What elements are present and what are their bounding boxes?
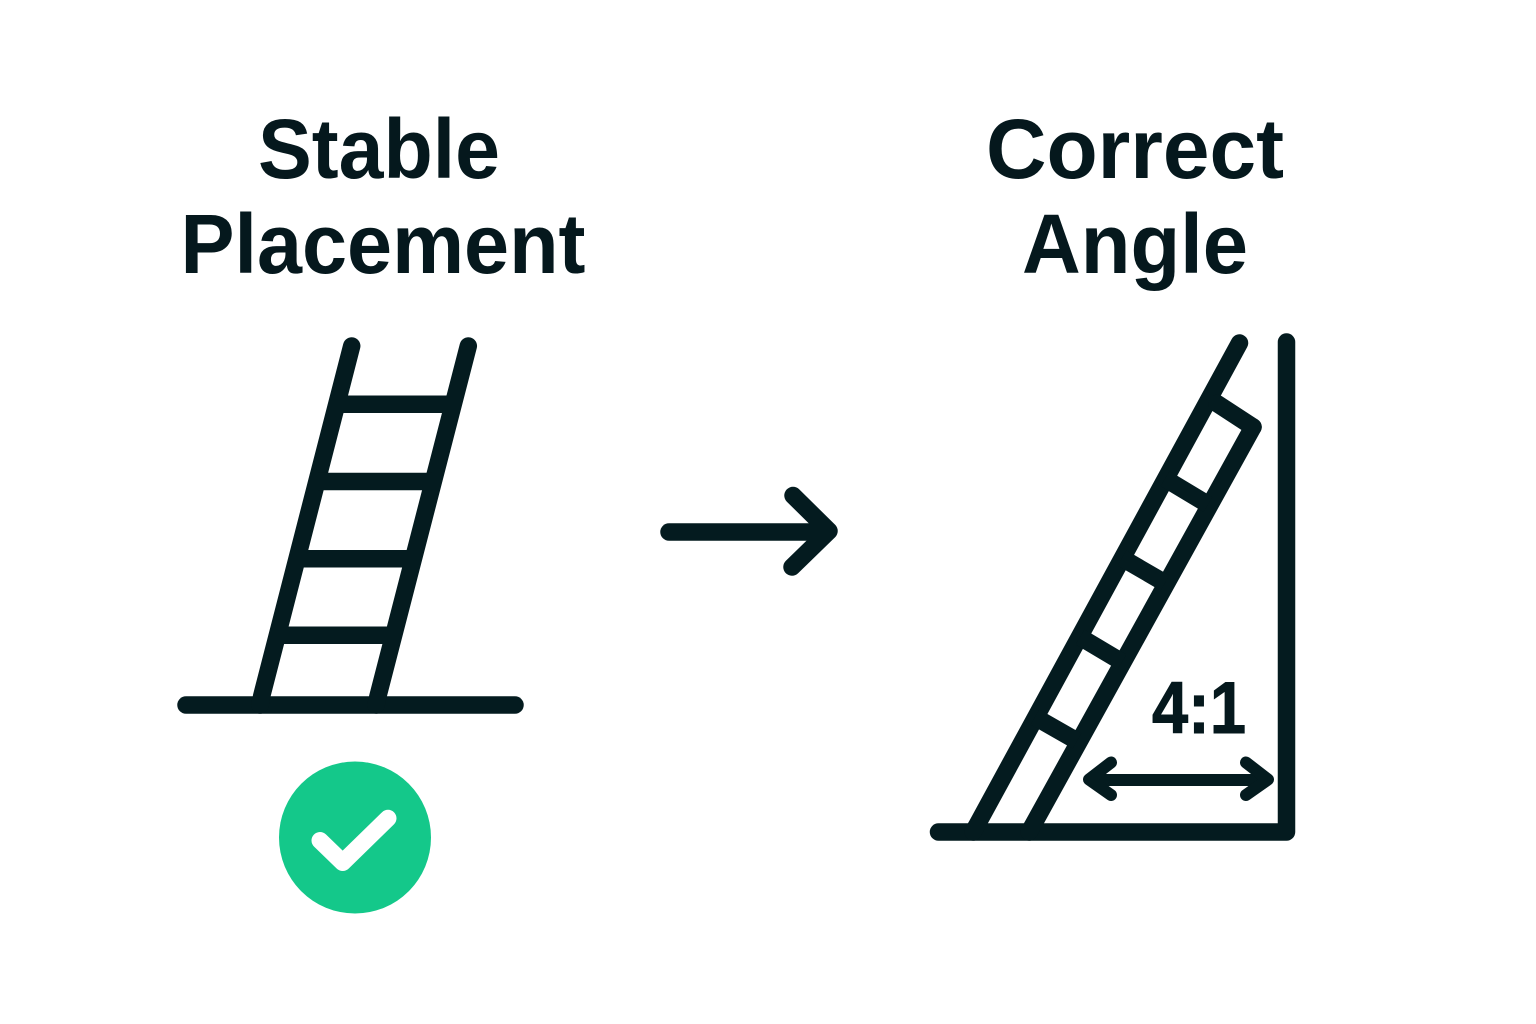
heading: Stable Placement: Placement <box>180 197 586 291</box>
heading: Stable Placement <box>180 102 586 291</box>
arrow: double-headed ratio measure <box>1089 762 1268 795</box>
icon: green check badge <box>279 762 431 914</box>
arrow: left to right <box>669 496 829 567</box>
icon: angled ladder against wall <box>938 342 1286 832</box>
heading: Correct Angle: Angle <box>1022 197 1248 291</box>
heading: Correct Angle <box>986 102 1284 291</box>
icon: stable ladder on ground <box>186 346 515 705</box>
label: 4:1 ratio: 4:1 <box>1152 668 1246 749</box>
heading: Stable Placement: Stable <box>258 102 500 196</box>
heading: Correct Angle: Correct <box>986 102 1284 196</box>
